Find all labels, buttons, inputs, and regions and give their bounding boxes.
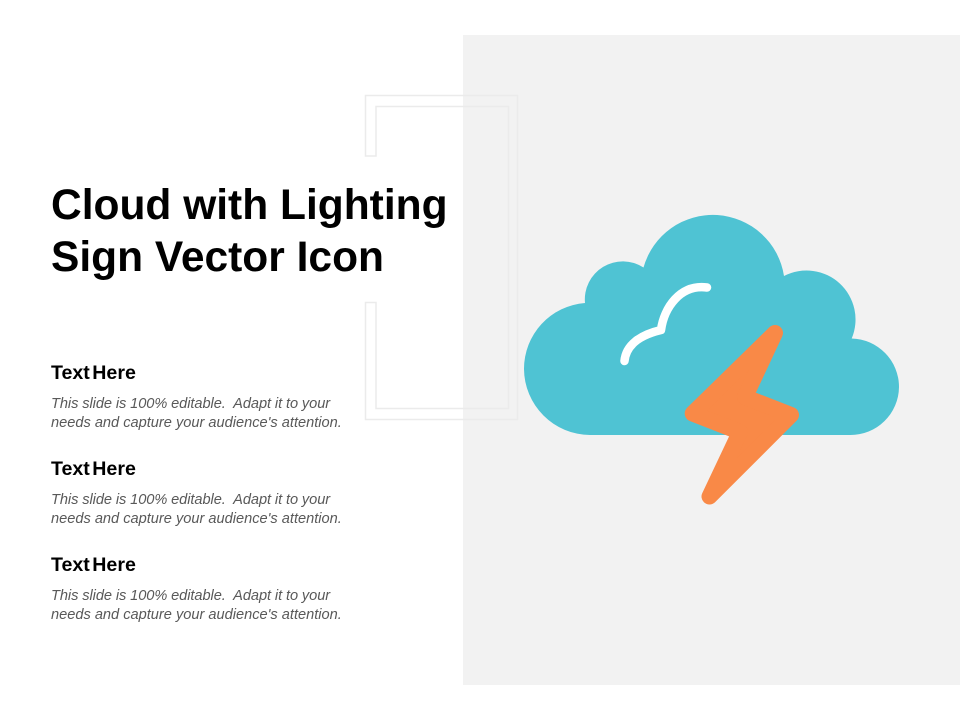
text block 3: [51, 554, 342, 622]
text block 1: [51, 362, 342, 430]
description 3: [51, 588, 342, 622]
description 1: This slide is 100% editable. Adapt it to your: [51, 396, 330, 412]
heading 3: Text Here: [51, 554, 136, 576]
text block 2: [51, 458, 342, 526]
description 3: needs and capture your audience's attention.: [51, 606, 342, 622]
description 2: This slide is 100% editable. Adapt it to your: [51, 492, 330, 508]
panel: grey background: [463, 35, 960, 685]
lightning bolt: [693, 333, 791, 496]
cloud highlight: [624, 287, 707, 361]
description 2: needs and capture your audience's attention.: [51, 510, 342, 526]
title: Sign Vector Icon: [51, 234, 384, 281]
description 1: [51, 396, 342, 430]
description 3: This slide is 100% editable. Adapt it to your: [51, 588, 330, 604]
title: Cloud with Lighting: [51, 182, 448, 229]
description 1: needs and capture your audience's attention.: [51, 414, 342, 430]
title: [51, 182, 448, 281]
description 2: [51, 492, 342, 526]
heading 1: Text Here: [51, 362, 136, 384]
cloud: [524, 215, 899, 435]
heading 2: Text Here: [51, 458, 136, 480]
